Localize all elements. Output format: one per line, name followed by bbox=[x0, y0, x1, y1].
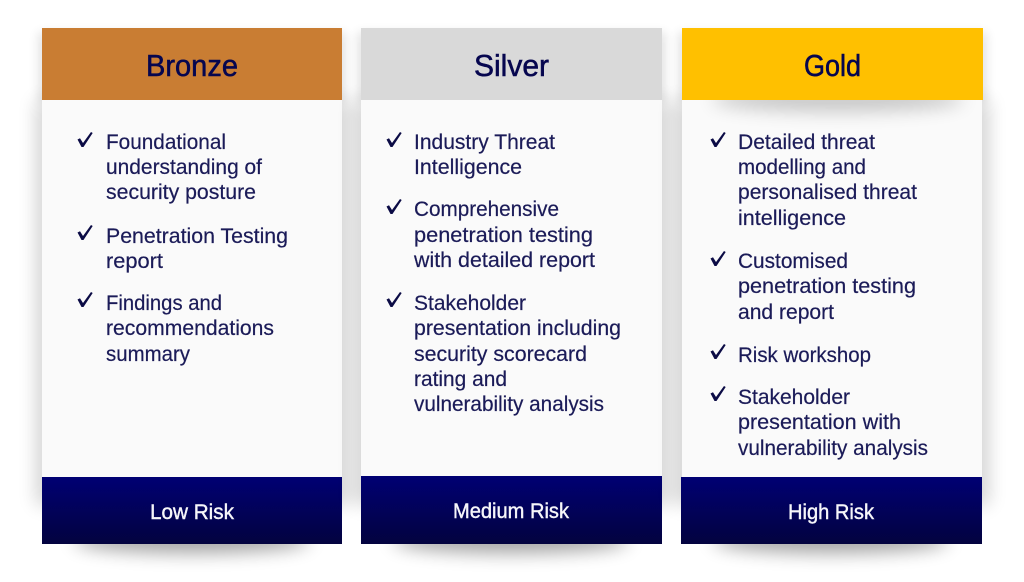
silver feature list: with detailed report bbox=[413, 249, 595, 272]
panel: bronze bbox=[36, 28, 348, 553]
gold footer: High Risk bbox=[788, 501, 874, 524]
gold header: Gold bbox=[804, 48, 861, 83]
silver feature list: rating and bbox=[414, 368, 507, 391]
gold feature list: presentation with bbox=[738, 411, 901, 434]
gold feature list bbox=[710, 131, 928, 460]
gold feature list: Risk workshop bbox=[738, 344, 871, 367]
gold feature list: Stakeholder bbox=[738, 386, 850, 409]
bronze feature list: understanding of bbox=[106, 156, 262, 179]
gold feature list: penetration testing bbox=[738, 275, 916, 298]
gold feature list: vulnerability analysis bbox=[738, 437, 928, 460]
bronze feature list: Findings and bbox=[106, 292, 222, 315]
silver footer: Medium Risk bbox=[453, 500, 569, 523]
bronze feature list: Foundational bbox=[106, 131, 226, 154]
silver feature list bbox=[386, 131, 621, 416]
silver feature list: Intelligence bbox=[414, 156, 522, 179]
panel: silver bbox=[355, 28, 668, 553]
silver feature list: Comprehensive bbox=[414, 198, 559, 221]
silver feature list: presentation including bbox=[414, 317, 621, 340]
bronze feature list bbox=[78, 131, 288, 366]
bronze feature list: Penetration Testing bbox=[106, 225, 288, 248]
silver feature list: Industry Threat bbox=[414, 131, 555, 154]
gold header shadow bbox=[712, 86, 964, 112]
bronze footer bbox=[42, 477, 342, 544]
silver footer bbox=[361, 476, 662, 544]
panel: gold bbox=[675, 28, 989, 553]
silver feature list: security scorecard bbox=[414, 343, 587, 366]
silver header: Silver bbox=[474, 48, 549, 83]
gold feature list: Detailed threat bbox=[738, 131, 875, 154]
gold feature list: Customised bbox=[738, 250, 848, 273]
gold feature list: and report bbox=[738, 301, 834, 324]
gold feature list: personalised threat bbox=[738, 181, 917, 204]
bronze feature list: security posture bbox=[106, 181, 256, 204]
silver header bbox=[361, 28, 662, 100]
silver feature list: Stakeholder bbox=[414, 292, 526, 315]
bronze feature list: report bbox=[106, 250, 163, 273]
gold feature list: modelling and bbox=[738, 156, 866, 179]
silver feature list: penetration testing bbox=[414, 224, 593, 247]
bronze footer: Low Risk bbox=[150, 501, 234, 524]
bronze header bbox=[42, 28, 342, 100]
silver feature list: vulnerability analysis bbox=[414, 393, 604, 416]
bronze header: Bronze bbox=[146, 48, 238, 83]
gold feature list: intelligence bbox=[738, 207, 846, 230]
bronze feature list: recommendations bbox=[106, 317, 274, 340]
bronze feature list: summary bbox=[106, 343, 190, 366]
gold header bbox=[682, 28, 983, 100]
gold footer bbox=[681, 477, 982, 544]
